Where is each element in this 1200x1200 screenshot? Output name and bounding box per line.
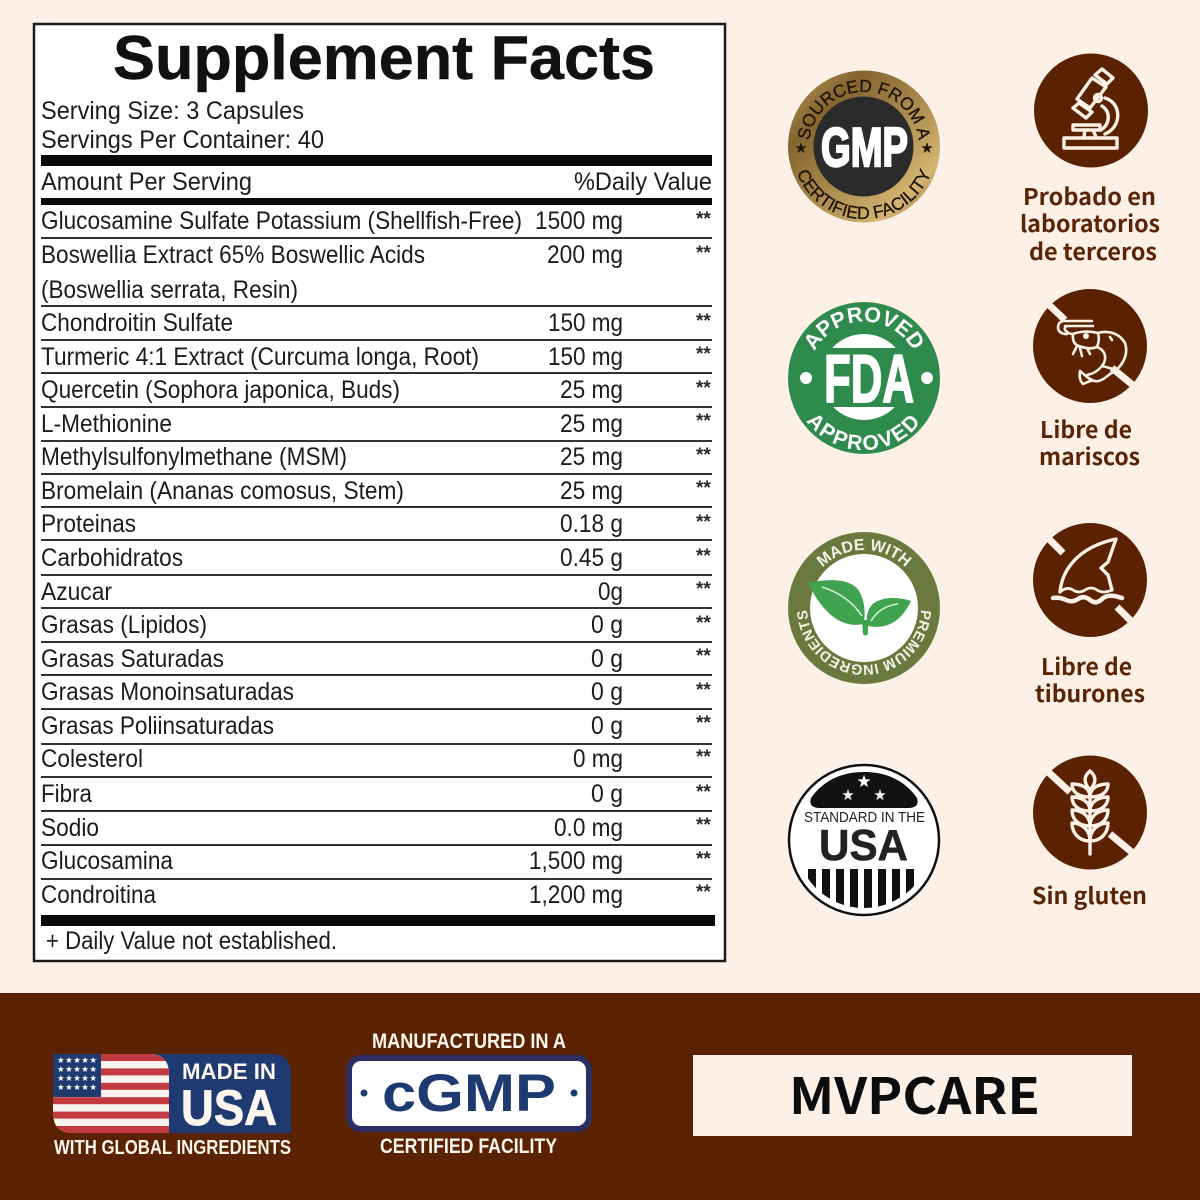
row: quercetin (41, 376, 711, 404)
row: fibra: ** (696, 782, 711, 803)
title: Supplement Facts (113, 24, 655, 93)
badge: GMP certified (788, 70, 940, 222)
row: grasas: Grasas (Lipidos) (41, 611, 207, 639)
icon: microscope (1034, 54, 1148, 168)
row: colesterol: 0 mg (573, 745, 623, 773)
row: chondroitin sulfate: 150 mg (548, 309, 623, 337)
row: chondroitin sulfate: ** (696, 311, 711, 332)
column header: amount per serving: Amount Per Serving (41, 168, 252, 196)
label: shark free (1035, 648, 1145, 709)
row: grasas monoinsaturadas (41, 678, 711, 706)
row: msm: 25 mg (560, 443, 623, 471)
row: grasas poliinsaturadas: ** (696, 713, 711, 734)
row: grasas saturadas (41, 645, 711, 673)
row: carbohidratos (41, 544, 711, 572)
badge: FDA approved: FDA (824, 341, 914, 417)
badge: standard in the USA: ★ (873, 786, 887, 804)
row: proteinas: ** (696, 512, 711, 533)
row: grasas monoinsaturadas: Grasas Monoinsaturadas (41, 678, 294, 706)
panel: supplement facts table (34, 24, 725, 961)
label: shellfish free (1039, 411, 1140, 472)
row: azucar: Azucar (41, 578, 112, 606)
row: bromelain (41, 477, 711, 505)
row: turmeric: ** (696, 344, 711, 365)
icon: no shark (1033, 523, 1147, 637)
row: carbohidratos: ** (696, 546, 711, 567)
badge: cGMP facility (349, 1030, 589, 1158)
row: sodio: ** (696, 815, 711, 836)
row: l-methionine: 25 mg (560, 410, 623, 438)
row: grasas saturadas: 0 g (591, 645, 623, 673)
row: msm: Methylsulfonylmethane (MSM) (41, 443, 347, 471)
row: grasas poliinsaturadas: 0 g (591, 712, 623, 740)
row: grasas saturadas: Grasas Saturadas (41, 645, 224, 673)
row: grasas: 0 g (591, 611, 623, 639)
brand box: MVPCARE (693, 1055, 1132, 1136)
label: gluten free: Sin gluten (1032, 877, 1147, 911)
badge: premium ingredients: PREMIUM INGREDIENTS (797, 610, 931, 676)
badge: standard in the USA: ★ (856, 772, 872, 792)
label: tested in labs: Probado en (1023, 178, 1156, 212)
badge: standard in the USA: STANDARD IN THE (804, 810, 925, 826)
row: bromelain: Bromelain (Ananas comosus, Stem) (41, 477, 404, 505)
row: msm (41, 443, 711, 471)
row: boswellia: Boswellia Extract 65% Boswellic Acids (41, 241, 425, 269)
row: condroitina: 1,200 mg (529, 881, 623, 909)
badge: cGMP facility: MANUFACTURED IN A (372, 1030, 566, 1053)
row: bromelain: ** (696, 478, 711, 499)
row: fibra: 0 g (591, 780, 623, 808)
icon: leaves (808, 580, 911, 636)
column header: daily value: %Daily Value (574, 168, 712, 196)
row: grasas monoinsaturadas: ** (696, 680, 711, 701)
label: tested in labs: laboratorios (1020, 205, 1160, 239)
badge: premium ingredients: MADE WITH (816, 538, 912, 567)
row: colesterol (41, 745, 711, 773)
row: grasas poliinsaturadas: Grasas Poliinsaturadas (41, 712, 274, 740)
label: tested in labs: de terceros (1029, 233, 1157, 267)
row: proteinas: 0.18 g (560, 510, 623, 538)
panel: footer band (0, 993, 1200, 1200)
row: quercetin: ** (696, 378, 711, 399)
row: turmeric: 150 mg (548, 343, 623, 371)
row: boswellia: (Boswellia serrata, Resin) (41, 276, 298, 304)
badge: GMP certified: GMP (821, 116, 908, 178)
row: glucosamina: 1,500 mg (529, 847, 623, 875)
badge: GMP certified: ★ (794, 139, 808, 157)
servings per container: Servings Per Container: 40 (41, 126, 324, 154)
row: msm: ** (696, 445, 711, 466)
row: carbohidratos: Carbohidratos (41, 544, 183, 572)
brand box: MVPCARE: MVPCARE (789, 1057, 1040, 1129)
row: l-methionine: L-Methionine (41, 410, 172, 438)
badge: FDA approved (788, 302, 940, 454)
row: condroitina (41, 881, 711, 909)
serving size: Serving Size: 3 Capsules (41, 97, 304, 125)
row: fibra (41, 780, 711, 808)
badge: made in USA (53, 1054, 291, 1159)
badge: FDA approved: APPROVED (806, 416, 918, 450)
badge: premium ingredients (788, 532, 940, 684)
label: shellfish free: Libre de (1040, 411, 1132, 445)
row: grasas poliinsaturadas (41, 712, 711, 740)
row: azucar: 0g (598, 578, 623, 606)
badge: made in USA: MADE IN (182, 1059, 276, 1084)
footnote: + Daily Value not established. (46, 927, 337, 955)
row: proteinas (41, 510, 711, 538)
row: glucosamina: ** (696, 849, 711, 870)
row: boswellia: ** (696, 243, 711, 264)
row: glucosamina (41, 847, 711, 875)
icon: no shellfish (1033, 289, 1147, 403)
icon: no gluten (1033, 756, 1147, 870)
label: shellfish free: mariscos (1039, 438, 1140, 472)
row: colesterol: ** (696, 747, 711, 768)
row: l-methionine: ** (696, 411, 711, 432)
row: sodio: Sodio (41, 814, 99, 842)
row: grasas monoinsaturadas: 0 g (591, 678, 623, 706)
row: turmeric: Turmeric 4:1 Extract (Curcuma longa, Root) (41, 343, 479, 371)
label: tested in labs (1020, 178, 1160, 267)
badge: made in USA: ★★★★★ (57, 1065, 97, 1075)
row: condroitina: Condroitina (41, 881, 156, 909)
row: boswellia: 200 mg (547, 241, 623, 269)
row: bromelain: 25 mg (560, 477, 623, 505)
row: chondroitin sulfate: Chondroitin Sulfate (41, 309, 233, 337)
badge: made in USA: WITH GLOBAL INGREDIENTS (54, 1137, 291, 1159)
row: sodio (41, 814, 711, 842)
badge: standard in the USA: ★ (841, 786, 855, 804)
badge: GMP certified: SOURCED FROM A (798, 80, 930, 141)
badge: standard in the USA: USA (819, 821, 908, 870)
badge: cGMP facility: CERTIFIED FACILITY (380, 1135, 557, 1158)
row: glucosamina: Glucosamina (41, 847, 173, 875)
label: shark free: Libre de (1041, 648, 1132, 682)
badge: made in USA: ★★★★★ (57, 1083, 97, 1093)
row: l-methionine (41, 410, 711, 438)
row: sodio: 0.0 mg (554, 814, 623, 842)
badge: made in USA: USA (181, 1080, 277, 1136)
row: glucosamine sulfate: ** (696, 209, 711, 230)
row: quercetin: Quercetin (Sophora japonica, Buds) (41, 376, 400, 404)
badge: standard in the USA (789, 765, 939, 915)
row: condroitina: ** (696, 882, 711, 903)
row: carbohidratos: 0.45 g (560, 544, 623, 572)
badge: GMP certified: CERTIFIED FACILITY (798, 168, 930, 220)
label: shark free: tiburones (1035, 675, 1145, 709)
row: azucar (41, 578, 711, 606)
row: grasas (41, 611, 711, 639)
badge: cGMP facility: cGMP (382, 1064, 556, 1123)
badge: GMP certified: ★ (920, 139, 934, 157)
row: glucosamine sulfate: 1500 mg (535, 207, 623, 235)
row: fibra: Fibra (41, 780, 92, 808)
row: colesterol: Colesterol (41, 745, 143, 773)
badge: made in USA: ★★★★★ (57, 1074, 97, 1084)
badge: FDA approved: APPROVED (806, 307, 923, 351)
row: quercetin: 25 mg (560, 376, 623, 404)
row: azucar: ** (696, 579, 711, 600)
badge: made in USA: ★★★★★ (57, 1056, 97, 1066)
row: proteinas: Proteinas (41, 510, 136, 538)
row: grasas: ** (696, 613, 711, 634)
row: boswellia (41, 241, 711, 304)
row: grasas saturadas: ** (696, 646, 711, 667)
row: glucosamine sulfate: Glucosamine Sulfate Potassium (Shellfish-Free) (41, 207, 522, 235)
row: chondroitin sulfate (41, 309, 711, 337)
